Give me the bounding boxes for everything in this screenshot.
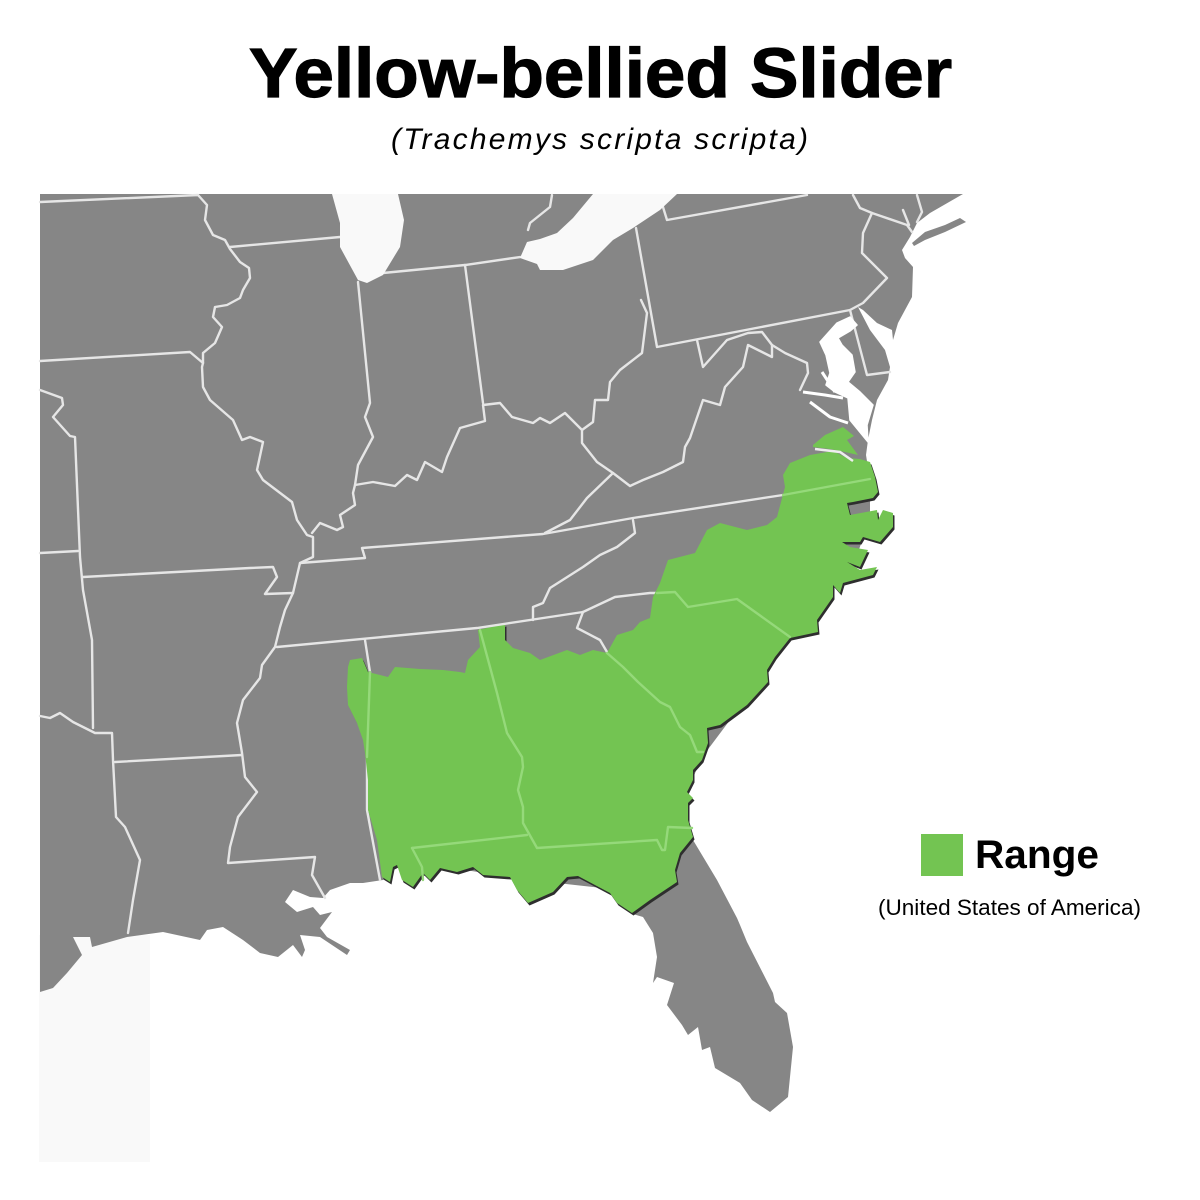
legend note: (United States of America) [878, 895, 1141, 920]
map: eastern United States [39, 194, 966, 1162]
title: Yellow-bellied Slider [249, 34, 952, 112]
legend label: Range [975, 833, 1099, 877]
lake erie [520, 194, 677, 270]
james river gap [815, 449, 853, 461]
legend [878, 833, 1141, 920]
subtitle: scientific name: (Trachemys scripta scripta) [391, 123, 808, 156]
state borders within range [367, 479, 870, 880]
chesapeake bay [803, 317, 873, 442]
range: northern lobe in Virginia [813, 427, 858, 455]
lake michigan [332, 194, 404, 283]
tennessee southern border over range [277, 612, 583, 647]
legend swatch [921, 834, 963, 876]
range area [347, 427, 894, 916]
state borders [40, 195, 922, 933]
land mass [40, 194, 963, 1112]
long island [912, 218, 966, 246]
